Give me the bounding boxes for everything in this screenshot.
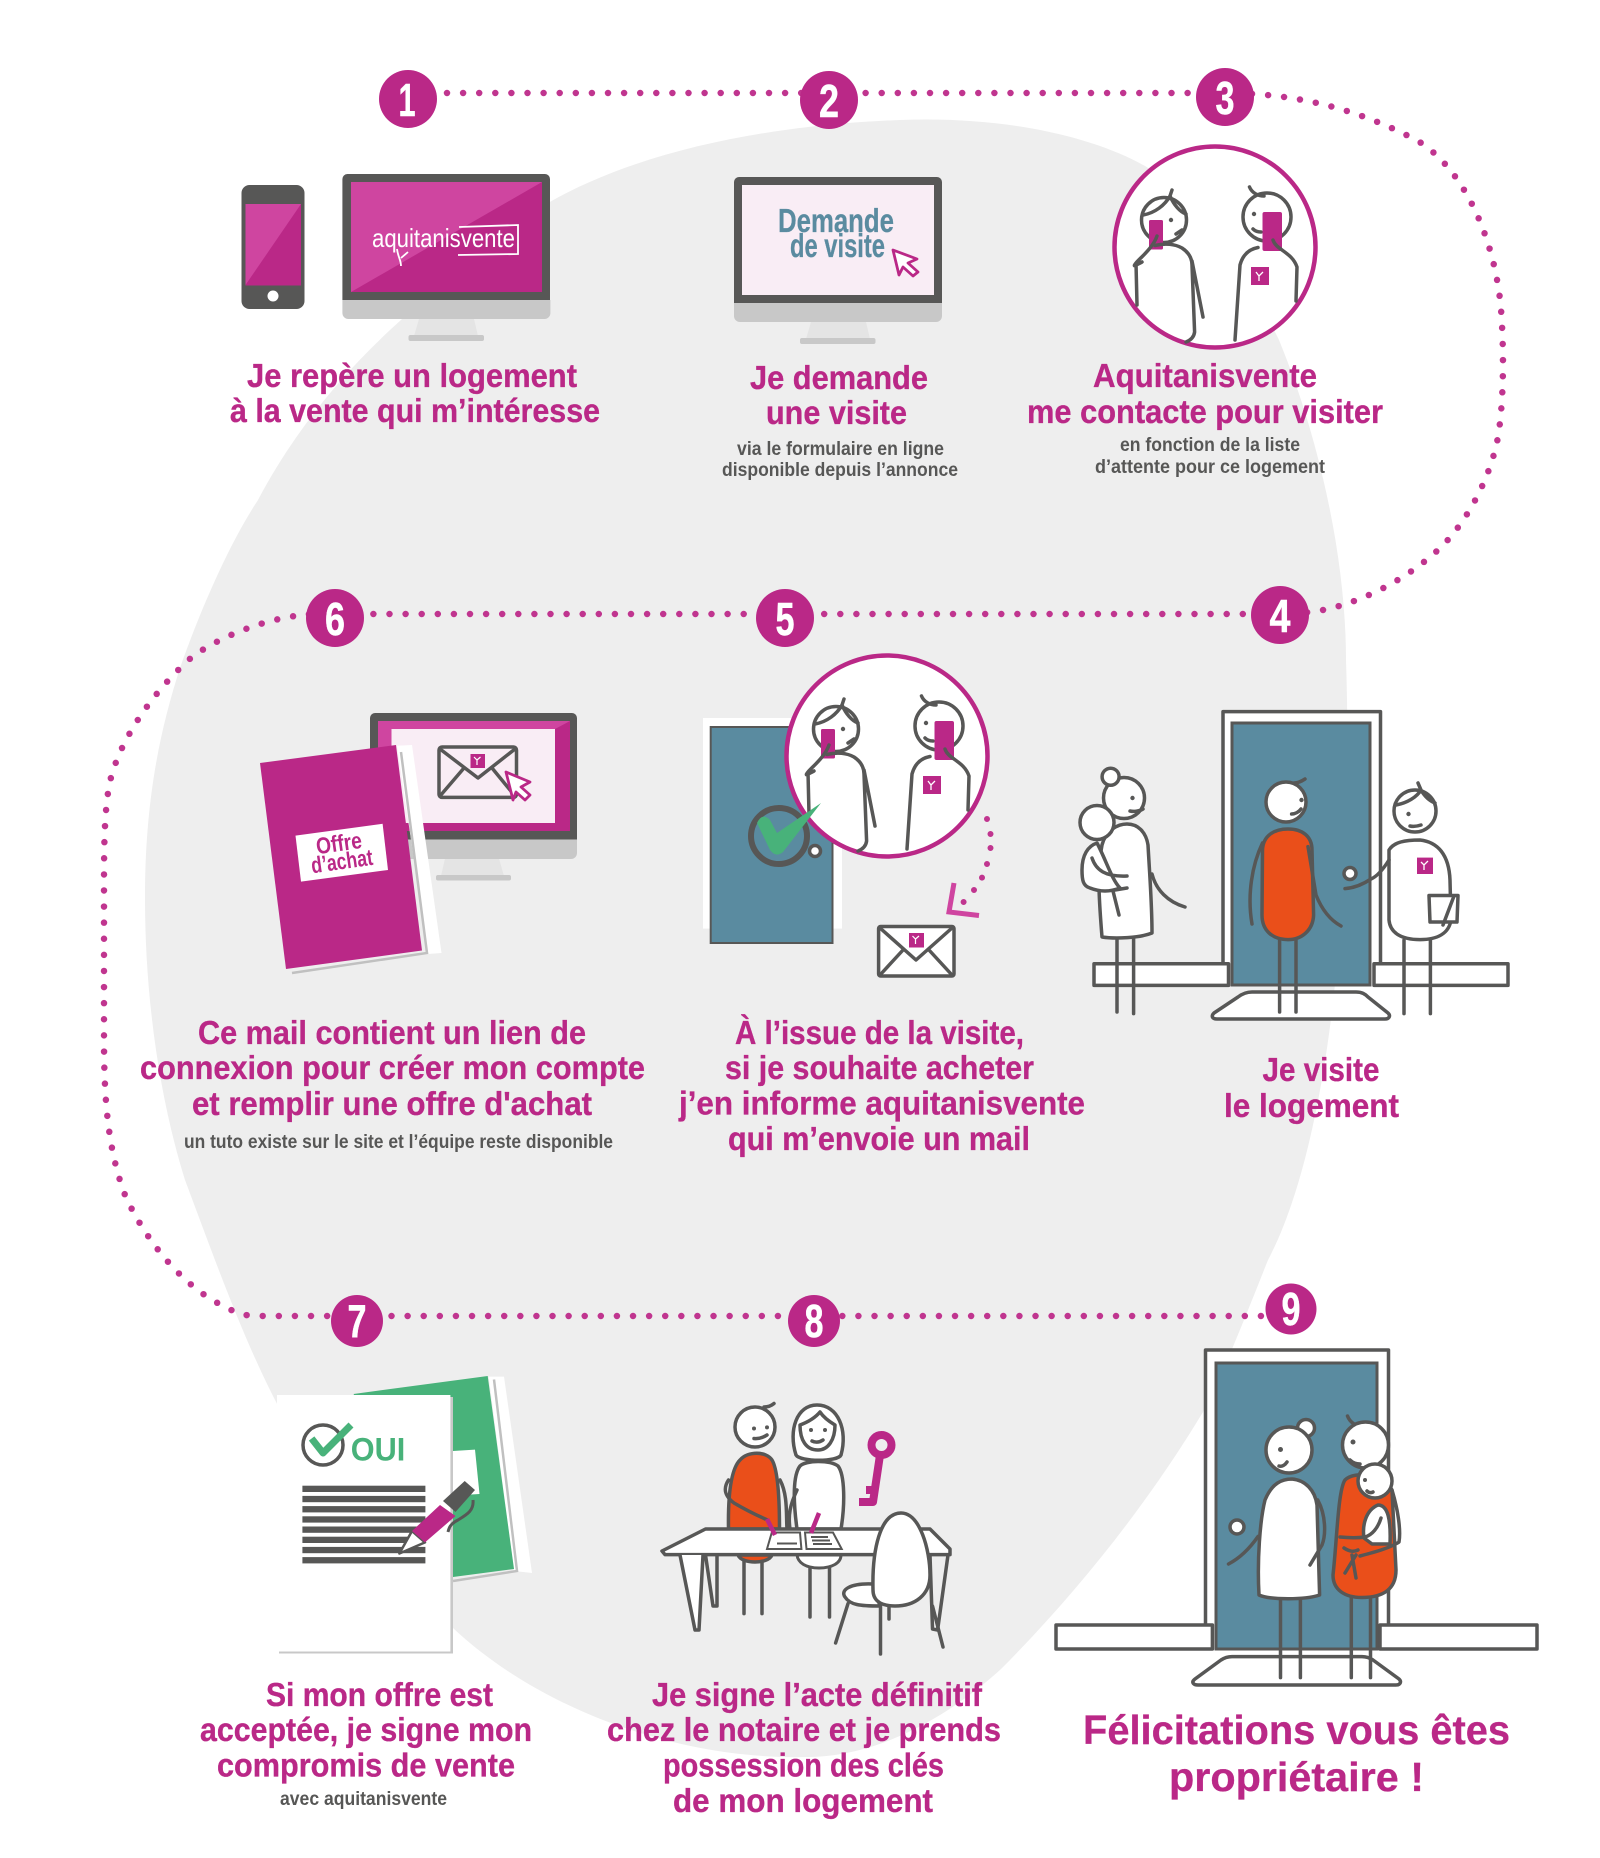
step number 3: [1196, 68, 1254, 126]
heading: step 8: de mon logement: [673, 1782, 933, 1819]
heading: step 7: acceptée, je signe mon: [200, 1711, 532, 1748]
note: step 2: [722, 438, 958, 481]
heading: step 7: compromis de vente: [217, 1746, 515, 1784]
heading: step 8: [607, 1676, 1001, 1819]
heading: step 5: [678, 1014, 1085, 1157]
step number 6: [306, 589, 364, 647]
heading: congratulations: [1083, 1707, 1510, 1800]
icon: monitor with visit request: Demande: [778, 202, 894, 239]
step number 1: 1: [398, 74, 416, 126]
heading: congratulations: Félicitations vous êtes: [1083, 1707, 1510, 1753]
heading: step 2: une visite: [766, 394, 907, 431]
heading: step 5: si je souhaite acheter: [725, 1049, 1034, 1086]
step number 2: 2: [819, 75, 839, 127]
heading: step 6: connexion pour créer mon compte: [140, 1049, 645, 1086]
heading: step 4: [1224, 1051, 1399, 1124]
heading: step 7: [200, 1676, 532, 1784]
icon: signed sales agreement: [277, 1376, 532, 1654]
step number 2: [800, 71, 858, 129]
heading: step 3: [1027, 357, 1383, 430]
heading: step 8: Je signe l’acte définitif: [652, 1676, 983, 1713]
step number 8: [788, 1295, 840, 1347]
step number 9: 9: [1282, 1283, 1300, 1335]
heading: step 7: Si mon offre est: [266, 1676, 493, 1713]
step number 8: 8: [804, 1295, 824, 1347]
step number 5: [756, 589, 814, 647]
note: step 7: avec aquitanisvente: [280, 1788, 447, 1810]
heading: step 1: à la vente qui m’intéresse: [230, 392, 600, 429]
icon: couple signing at the notary table with key: [662, 1404, 950, 1654]
step number 9: [1266, 1283, 1316, 1335]
icon: signed sales agreement: OUI: [351, 1432, 405, 1468]
note: step 3: d’attente pour ce logement: [1095, 456, 1325, 478]
dotted path linking the steps: [104, 93, 1503, 1316]
step number 7: 7: [348, 1295, 366, 1347]
icon: monitor with mail and purchase offer booklet: Offre: [314, 827, 363, 859]
heading: step 2: [750, 359, 928, 431]
icon: monitor with aquitanisvente logo: aquitanisvente: [372, 223, 515, 253]
background grey blob: [145, 119, 1347, 1757]
icon: phone: [242, 185, 304, 309]
icon: monitor with aquitanisvente logo: [342, 174, 550, 341]
heading: step 6: et remplir une offre d'achat: [192, 1085, 592, 1122]
icon: phone call between two people: [1114, 146, 1316, 348]
note: step 6: un tuto existe sur le site et l’équipe reste disponible: [184, 1131, 613, 1153]
heading: step 6: Ce mail contient un lien de: [198, 1014, 586, 1051]
heading: step 1: Je repère un logement: [247, 357, 577, 394]
step number 4: 4: [1270, 590, 1291, 642]
icon: monitor with visit request: de visite: [790, 227, 885, 264]
heading: step 6: [140, 1014, 645, 1122]
icon: monitor with visit request: [734, 177, 942, 344]
step number 6: 6: [325, 593, 345, 645]
step number 5: 5: [776, 593, 794, 645]
note: step 2: via le formulaire en ligne: [737, 438, 944, 460]
heading: step 8: chez le notaire et je prends: [607, 1711, 1001, 1748]
note: step 2: disponible depuis l’annonce: [722, 459, 958, 481]
heading: congratulations: propriétaire !: [1169, 1754, 1424, 1800]
heading: step 5: À l’issue de la visite,: [735, 1014, 1024, 1051]
icon: door, phone call and mail: [703, 656, 994, 976]
step number 7: [331, 1295, 383, 1347]
step number 1: [379, 70, 437, 128]
heading: step 4: le logement: [1224, 1087, 1399, 1124]
icon: new owners in front of their door: [1056, 1350, 1537, 1685]
heading: step 5: j’en informe aquitanisvente: [678, 1084, 1085, 1122]
step number 4: [1251, 586, 1309, 644]
icon: monitor with mail and purchase offer booklet: [260, 713, 577, 973]
heading: step 1: [230, 357, 600, 429]
note: step 3: en fonction de la liste: [1120, 434, 1300, 456]
note: step 3: [1095, 434, 1325, 478]
heading: step 3: me contacte pour visiter: [1027, 393, 1383, 430]
step number 3: 3: [1216, 72, 1234, 124]
heading: step 3: Aquitanisvente: [1093, 357, 1317, 394]
icon: door with visitors: [1080, 712, 1508, 1019]
heading: step 4: Je visite: [1262, 1051, 1380, 1088]
heading: step 8: possession des clés: [663, 1746, 944, 1784]
heading: step 5: qui m’envoie un mail: [728, 1120, 1030, 1157]
icon: monitor with mail and purchase offer booklet: d’achat: [309, 844, 375, 878]
heading: step 2: Je demande: [750, 359, 928, 396]
